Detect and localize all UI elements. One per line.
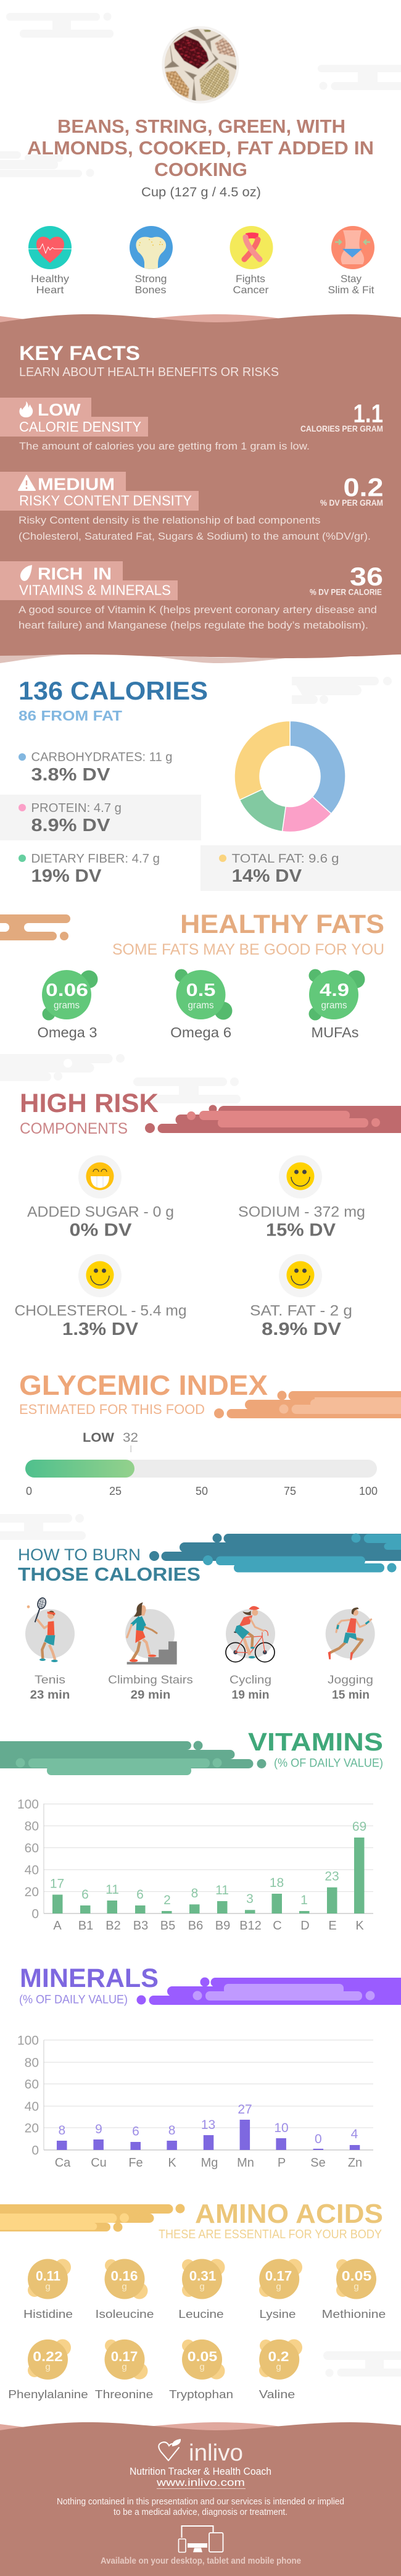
amino: threonine [95,2340,153,2401]
fact: low calorie density: 1.1 [353,399,383,428]
food photo: bags of beans [162,26,239,104]
benefit: strong bones: Strong [134,273,167,285]
amino: valine: Valine [259,2388,295,2401]
macro: total fat: TOTAL FAT: 9.6 g [232,852,339,866]
fact: medium risky content density: Risky Content density is the relationship of bad components [19,515,321,526]
amino: leucine: g [199,2281,205,2292]
decorative bars: healthy fats [0,914,70,940]
logo: inlivo: inlivo [189,2440,243,2466]
fact: medium risky content density [0,472,384,542]
glycemic bar: 50 [196,1485,208,1497]
fact: low calorie density: CALORIES PER GRAM [300,424,383,433]
vitamins bar chart: 80 [25,1819,39,1834]
macro: protein: 8.9% DV [31,816,110,835]
amino: histidine [23,2259,73,2320]
fact: rich in vitamins and minerals: 36 [350,562,383,591]
minerals subheading: (% OF DAILY VALUE) [19,1993,128,2007]
activity: jogging [326,1607,375,1702]
amino: isoleucine: Isoleucine [95,2308,154,2320]
amino: isoleucine [95,2259,154,2320]
minerals bar chart [17,2034,373,2170]
benefit: healthy heart: Heart [36,284,64,296]
vitamins bar chart: 6 [81,1888,89,1902]
fact: low calorie density [0,398,383,452]
decorative cloud: above burn section [0,1514,86,1540]
glycemic bar: 25 [109,1485,122,1497]
fact: medium risky content density: 0.2 [343,473,384,501]
amino: methionine: Methionine [322,2308,386,2320]
amino: valine: 0.2 [268,2349,289,2364]
amino: valine: g [276,2362,281,2372]
decorative bars: glycemic index [214,1390,401,1418]
donut chart [234,721,345,832]
calories from fat: 86 FROM FAT [19,708,122,724]
fat: MUFAs: MUFAs [311,1024,359,1040]
minerals bar chart: 27 [238,2102,252,2117]
activity: climbing stairs: Climbing Stairs [108,1673,193,1686]
title: ALMONDS, COOKED, FAT ADDED IN [27,137,374,159]
fact: medium risky content density: RISKY CONTENT DENSITY [19,493,192,509]
fat: omega 6: Omega 6 [170,1024,231,1040]
glycemic value [83,1431,138,1452]
minerals bar chart: 4 [351,2127,358,2141]
component: added sugar [27,1155,174,1240]
high risk heading: HIGH RISK [20,1089,159,1118]
amino: leucine [178,2259,225,2320]
vitamins bar chart: 8 [191,1886,198,1901]
vitamins bar chart: B5 [160,1919,175,1933]
minerals bar chart: 100 [17,2034,39,2047]
panel: footer [0,2422,401,2576]
decorative cloud: right of amino acids [323,2351,401,2377]
fact: rich in vitamins and minerals: % DV PER CALORIE [310,587,382,596]
activity: cycling: Cycling [229,1673,271,1686]
minerals bar chart: Mn [237,2156,254,2170]
component: added sugar: 0% DV [69,1221,132,1240]
fat: omega 6 [170,969,232,1040]
benefit: stay slim and fit: Slim & Fit [328,284,374,296]
burn heading line 1: HOW TO BURN [18,1545,141,1564]
fat: omega 3: 0.06 [46,981,88,1000]
macro: dietary fiber [19,852,160,886]
benefit: healthy heart [28,226,72,296]
tagline: Nutrition Tracker & Health Coach [130,2466,271,2477]
decorative bars: burn [149,1534,401,1572]
title: BEANS, STRING, GREEN, WITH [57,115,345,137]
fact: rich in vitamins and minerals: VITAMINS & MINERALS [19,582,171,598]
decorative bars: minerals [137,1977,401,2005]
minerals bar chart: 80 [25,2056,39,2070]
component: sodium [238,1155,365,1240]
vitamins bar chart: 20 [25,1885,39,1899]
amino: tryptophan: g [199,2362,205,2372]
glycemic index heading: GLYCEMIC INDEX [19,1370,268,1401]
vitamins bar chart: E [328,1919,337,1933]
fact: rich in vitamins and minerals: heart failure) and Manganese (helps regulate the body’s metabolism). [19,620,368,631]
amino: tryptophan: 0.05 [188,2349,217,2364]
fat: omega 3: grams [54,1000,80,1011]
amino: valine [259,2339,302,2401]
vitamins bar chart: 23 [325,1870,339,1884]
logo: inlivo [159,2439,243,2466]
amino: histidine: 0.11 [36,2269,60,2284]
vitamins bar chart: 100 [17,1797,39,1812]
minerals bar chart: 8 [58,2123,65,2138]
decorative bars: high risk [145,1105,401,1133]
minerals bar chart: 40 [25,2099,39,2114]
title [27,115,374,180]
fat: MUFAs: grams [321,1000,347,1011]
panel: minerals [17,1963,401,2170]
benefit: strong bones: Bones [134,284,167,296]
component: sodium: 15% DV [266,1221,336,1240]
fact: rich in vitamins and minerals [0,561,383,631]
disclaimer [57,2497,344,2517]
component: saturated fat: SAT. FAT - 2 g [250,1303,352,1319]
fact: low calorie density: The amount of calories you are getting from 1 gram is low. [19,441,310,452]
vitamins bar chart: C [273,1919,282,1933]
decorative bars: vitamins [0,1741,267,1775]
minerals bar chart: 13 [201,2118,215,2132]
availability note: Available on your desktop, tablet and mobile phone [101,2556,301,2566]
decorative cloud: calories [292,677,392,704]
title: COOKING [154,159,247,180]
calories heading: 136 CALORIES [19,676,208,705]
panel: key facts [0,314,401,663]
macro: total fat [200,845,401,891]
component: cholesterol: 1.3% DV [62,1319,139,1339]
panel: amino acids [0,2199,386,2401]
minerals bar chart: Fe [128,2156,143,2170]
glycemic bar: 0 [26,1485,32,1497]
amino: lysine: g [276,2281,281,2292]
activity: jogging: Jogging [328,1673,373,1686]
macro: dietary fiber: DIETARY FIBER: 4.7 g [31,852,160,866]
amino: lysine [259,2259,302,2320]
activity: climbing stairs [108,1602,193,1702]
minerals bar chart: 9 [95,2122,102,2136]
glycemic bar [25,1460,378,1497]
fat: omega 3 [37,970,97,1040]
glycemic value: LOW [83,1431,114,1445]
amino: methionine: g [353,2281,359,2292]
vitamins bar chart: B3 [133,1919,148,1933]
amino: phenylalanine: Phenylalanine [8,2388,88,2401]
vitamins bar chart: 11 [105,1883,119,1897]
macro: dietary fiber: 19% DV [31,866,102,886]
benefit: fights cancer: Cancer [233,284,269,296]
key facts subheading: LEARN ABOUT HEALTH BENEFITS OR RISKS [19,366,279,379]
amino: histidine: Histidine [23,2308,73,2320]
amino acids subheading: THESE ARE ESSENTIAL FOR YOUR BODY [159,2228,382,2241]
vitamins subheading: (% OF DAILY VALUE) [274,1757,383,1770]
minerals bar chart: P [278,2156,286,2170]
glycemic bar: 75 [284,1485,296,1497]
minerals bar chart: 10 [274,2121,289,2135]
amino: lysine: 0.17 [265,2269,292,2284]
vitamins bar chart: 60 [25,1841,39,1855]
vitamins bar chart: 69 [352,1820,366,1834]
fact: medium risky content density: (Cholesterol, Saturated Fat, Sugars & Sodium) to the amount (%DV/gr). [19,531,371,542]
decorative bars: amino acids [0,2204,185,2231]
panel: how to burn those calories [18,1534,401,1702]
vitamins bar chart: K [355,1919,364,1933]
benefit: strong bones [130,226,173,296]
minerals bar chart: Zn [348,2156,362,2170]
macro: protein [0,795,201,840]
vitamins bar chart: 17 [50,1877,64,1891]
panel: vitamins [0,1728,383,1933]
vitamins bar chart: B9 [215,1919,230,1933]
benefit: stay slim and fit: Stay [341,273,362,285]
glycemic bar: 100 [359,1485,378,1497]
minerals bar chart: Mg [201,2156,218,2170]
amino: phenylalanine [8,2339,88,2401]
panel: glycemic index [19,1370,401,1497]
activity: jogging: 15 min [332,1689,370,1702]
minerals bar chart: Ca [55,2156,71,2170]
macro: carbohydrates [19,751,173,785]
vitamins heading: VITAMINS [248,1728,383,1756]
serving size: Cup (127 g / 4.5 oz) [141,185,261,199]
minerals bar chart: 0 [31,2144,39,2157]
website link: www.inlivo.com [156,2477,245,2488]
benefit: fights cancer: Fights [236,273,265,285]
vitamins bar chart: B12 [239,1919,262,1933]
activity: cycling [226,1606,275,1702]
panel: calories [0,676,401,891]
minerals bar chart: 6 [132,2124,139,2139]
fat: omega 6: 0.5 [186,981,216,1000]
vitamins bar chart: B6 [188,1919,203,1933]
benefit: stay slim and fit [328,226,374,296]
activity: tennis: Tenis [35,1673,65,1686]
fact: medium risky content density: MEDIUM [38,474,115,494]
healthy fats heading: HEALTHY FATS [180,910,384,939]
activity: tennis [25,1597,75,1702]
amino: leucine: Leucine [178,2308,224,2320]
decorative cloud: left of title [0,151,94,177]
vitamins bar chart: 40 [25,1863,39,1877]
component: cholesterol: CHOLESTEROL - 5.4 mg [15,1303,186,1319]
decorative cloud: top right [318,65,401,90]
glycemic value: 32 [123,1431,138,1445]
amino: histidine: g [45,2281,51,2292]
disclaimer: to be a medical advice, diagnosis or treatment. [114,2507,287,2517]
vitamins bar chart: A [53,1919,62,1933]
macro: total fat: 14% DV [232,866,302,886]
amino: phenylalanine: g [45,2362,51,2372]
activity: cycling: 19 min [232,1689,269,1702]
vitamins bar chart [17,1797,373,1933]
minerals bar chart: K [168,2156,176,2170]
minerals bar chart: Se [310,2156,326,2170]
glycemic index subheading: ESTIMATED FOR THIS FOOD [19,1402,205,1417]
amino: lysine: Lysine [259,2308,296,2320]
fat: MUFAs [308,969,365,1040]
amino: isoleucine: 0.16 [111,2269,138,2284]
panel: healthy fats [0,910,384,1040]
macro: protein: PROTEIN: 4.7 g [31,801,122,815]
vitamins bar chart: 18 [270,1876,284,1890]
amino: methionine [322,2259,386,2320]
disclaimer: Nothing contained in this presentation and our services is intended or implied [57,2497,344,2507]
vitamins bar chart: 6 [136,1888,144,1902]
panel: high risk components [15,1089,401,1339]
fat: MUFAs: 4.9 [320,981,349,1000]
minerals bar chart: 60 [25,2077,39,2092]
fact: low calorie density: CALORIE DENSITY [19,419,141,435]
macro: carbohydrates: 3.8% DV [31,765,110,785]
fat: omega 3: Omega 3 [37,1024,97,1040]
fact: rich in vitamins and minerals: A good source of Vitamin K (helps prevent coronary artery disease and [19,604,377,616]
minerals bar chart: 0 [315,2132,322,2146]
amino: tryptophan [169,2340,233,2401]
benefit: healthy heart: Healthy [31,273,70,285]
minerals bar chart: 8 [168,2123,175,2138]
activity: climbing stairs: 29 min [131,1689,170,1702]
vitamins bar chart: 3 [246,1892,254,1906]
vitamins bar chart: 1 [300,1893,308,1907]
macro: carbohydrates: CARBOHYDRATES: 11 g [31,751,173,764]
component: added sugar: ADDED SUGAR - 0 g [27,1204,174,1221]
decorative cloud: above high risk right [133,1077,241,1103]
amino: leucine: 0.31 [189,2269,216,2284]
component: sodium: SODIUM - 372 mg [238,1204,365,1221]
decorative cloud: top left [6,12,114,38]
amino: threonine: g [122,2362,127,2372]
amino: phenylalanine: 0.22 [33,2349,63,2364]
component: saturated fat [250,1254,352,1339]
amino: methionine: 0.05 [342,2269,371,2284]
vitamins bar chart: D [300,1919,310,1933]
minerals heading: MINERALS [20,1963,159,1993]
vitamins bar chart: 0 [31,1907,39,1922]
key facts heading: KEY FACTS [19,342,140,364]
icon: devices [179,2526,223,2553]
activity: tennis: 23 min [30,1689,70,1702]
vitamins bar chart: 11 [215,1883,229,1897]
healthy fats subheading: SOME FATS MAY BE GOOD FOR YOU [112,941,384,958]
amino: isoleucine: g [122,2281,127,2292]
fat: omega 6: grams [188,1000,213,1011]
amino: tryptophan: Tryptophan [169,2388,233,2401]
vitamins bar chart: B1 [78,1919,93,1933]
amino acids heading: AMINO ACIDS [195,2199,383,2229]
vitamins bar chart: B2 [105,1919,121,1933]
amino: threonine: Threonine [95,2388,153,2401]
vitamins bar chart: 2 [163,1893,171,1907]
fact: low calorie density: LOW [38,400,81,419]
amino: threonine: 0.17 [111,2349,138,2364]
minerals bar chart: Cu [91,2156,107,2170]
fact: rich in vitamins and minerals: RICH IN [38,564,112,583]
high risk subheading: COMPONENTS [20,1120,128,1137]
burn heading line 2: THOSE CALORIES [18,1563,200,1585]
minerals bar chart: 20 [25,2122,39,2135]
fact: medium risky content density: % DV PER GRAM [320,498,383,508]
component: cholesterol [15,1254,186,1339]
component: saturated fat: 8.9% DV [262,1319,342,1339]
benefit: fights cancer [229,226,273,296]
decorative cloud: above high risk left [0,1054,125,1081]
